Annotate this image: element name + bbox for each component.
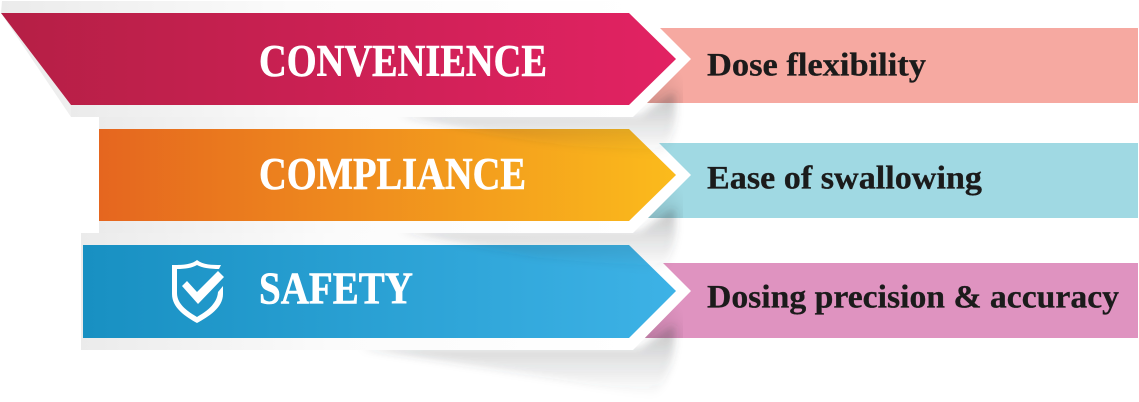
arrow: compliance — [99, 117, 691, 233]
label: ease of swallowing: Ease of swallowing — [707, 160, 983, 196]
shadow: under second arrow — [400, 208, 676, 272]
heading: convenience: CONVENIENCE — [259, 36, 547, 86]
label: dosing precision and accuracy: Dosing precision & accuracy — [707, 280, 1120, 316]
icon: shield with check — [172, 260, 224, 323]
panel: dose flexibility bar — [645, 28, 1138, 103]
panel: dosing precision bar — [645, 263, 1138, 338]
shadow: under third arrow — [360, 325, 675, 396]
arrow: safety — [81, 233, 691, 350]
shadow: under first arrow — [400, 92, 676, 156]
label: dose flexibility: Dose flexibility — [707, 48, 927, 84]
heading: safety: SAFETY — [259, 264, 413, 314]
arrow: convenience — [1, 1, 691, 117]
heading: compliance: COMPLIANCE — [259, 149, 526, 199]
panel: ease of swallowing bar — [645, 143, 1138, 218]
